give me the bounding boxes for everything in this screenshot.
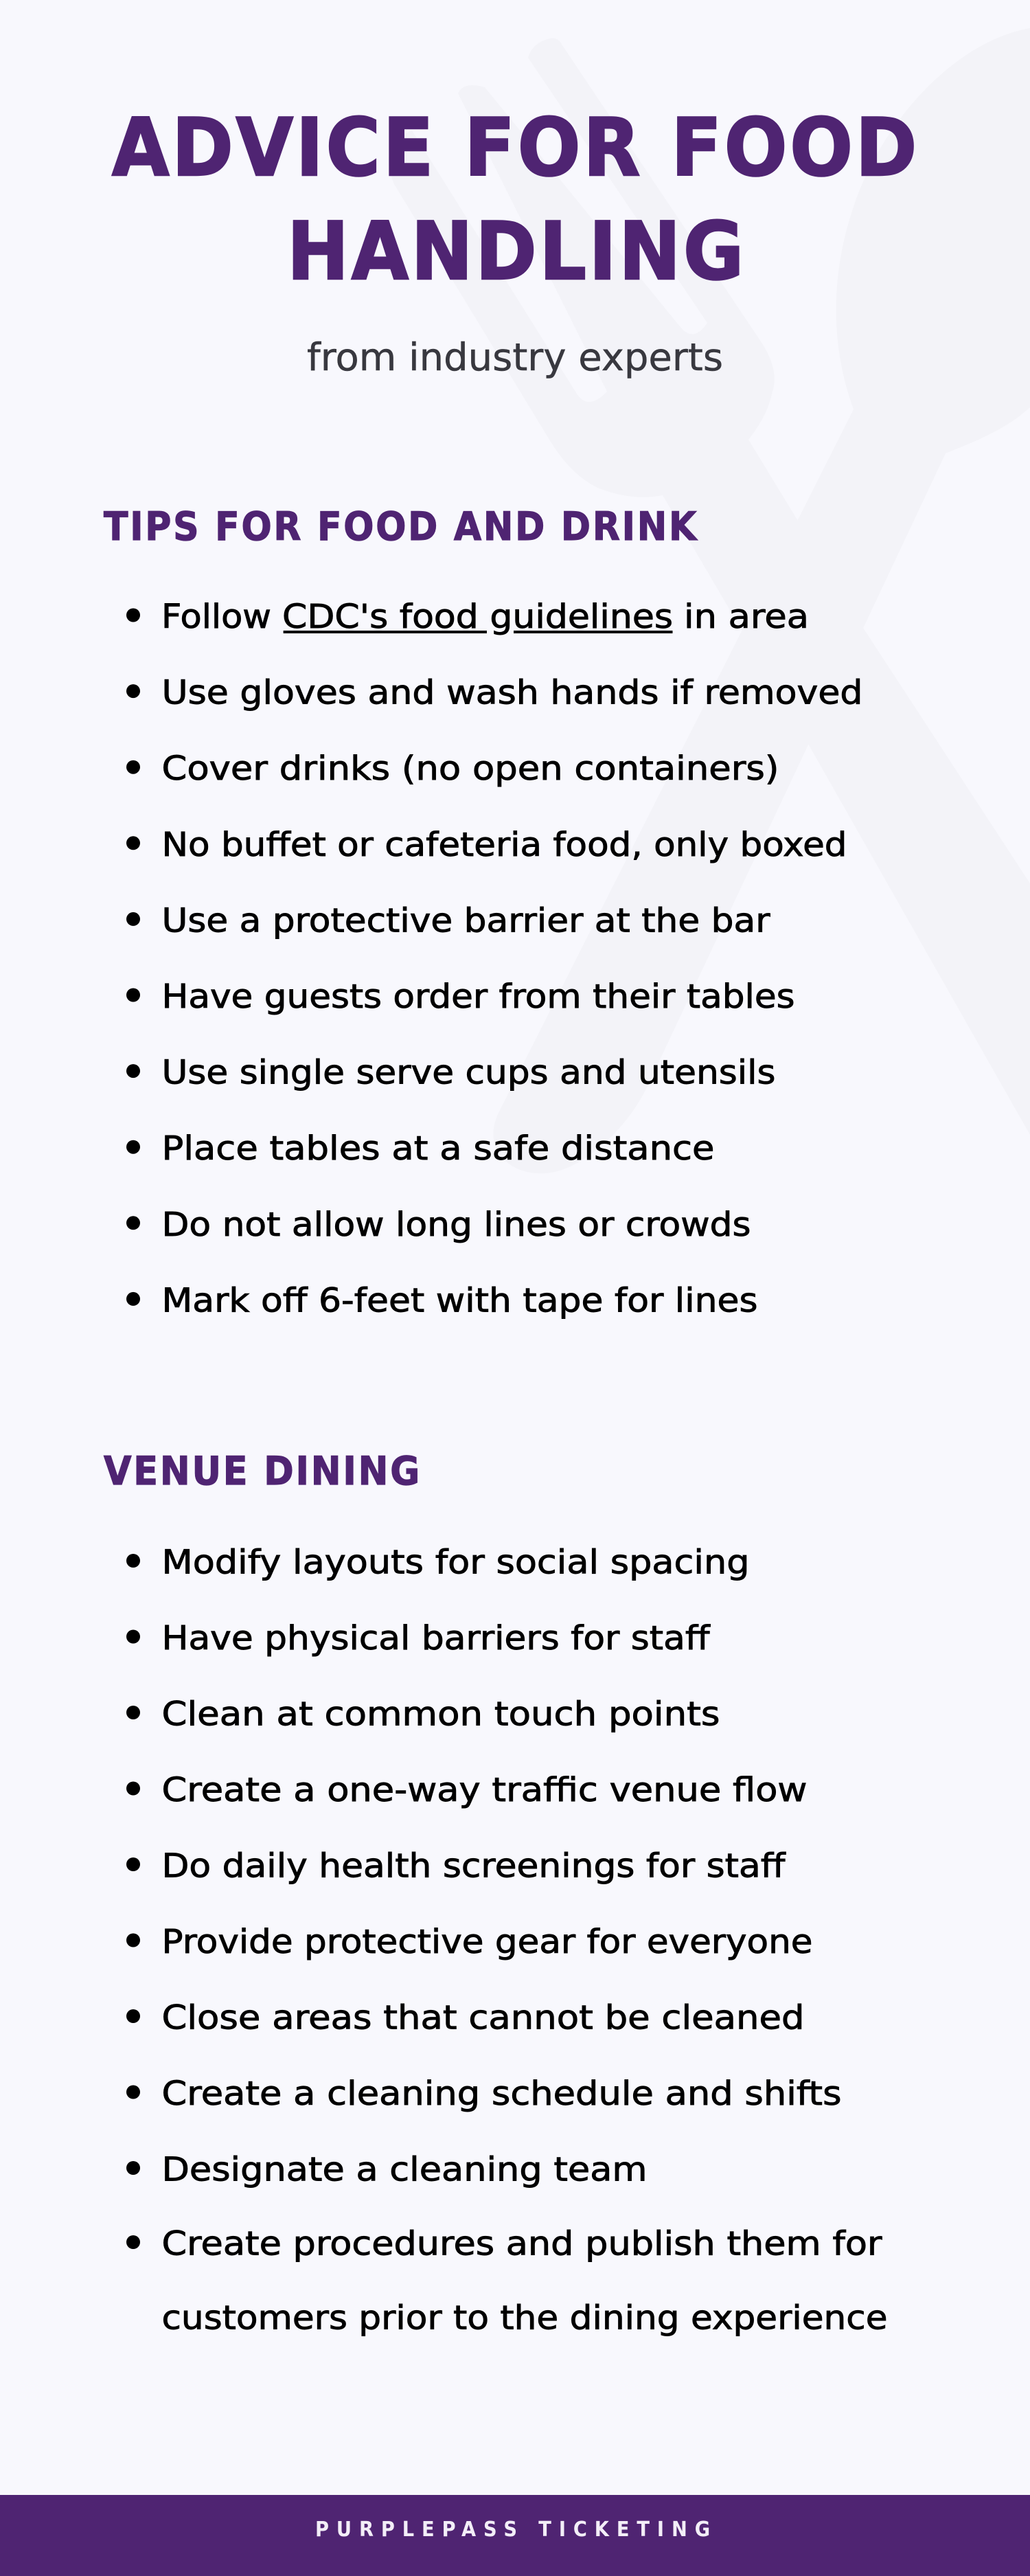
list item 1: Follow (161, 598, 271, 636)
list item 8: Place tables at a safe distance (162, 1129, 714, 1168)
title: HANDLING (287, 205, 746, 298)
list item 1: CDC's food guidelines (282, 598, 673, 636)
list item 6: Provide protective gear for everyone (162, 1923, 813, 1961)
list item 7: Close areas that cannot be cleaned (162, 1999, 805, 2037)
list item 10: customers prior to the dining experience (162, 2298, 887, 2337)
list item 9: Designate a cleaning team (162, 2150, 647, 2189)
list item 5: Do daily health screenings for staff (162, 1846, 786, 1885)
footer bar (0, 2495, 1030, 2576)
list: tips for food and drink (126, 598, 862, 1320)
list item 1: in area (684, 598, 809, 636)
icon: spoon (493, 28, 1030, 1173)
list item 4: No buffet or cafeteria food, only boxed (162, 826, 847, 864)
list item 10: Create procedures and publish them for (162, 2224, 882, 2263)
list item 1: Modify layouts for social spacing (162, 1543, 750, 1581)
list item 8: Create a cleaning schedule and shifts (162, 2075, 842, 2113)
list item 5: Use a protective barrier at the bar (162, 901, 770, 940)
icon: fork (389, 38, 1030, 1135)
list item 7: Use single serve cups and utensils (162, 1054, 776, 1092)
list item 4: Create a one-way traffic venue flow (162, 1771, 808, 1809)
list item 1 (126, 598, 809, 636)
icon: fork and spoon watermark (389, 28, 1030, 1173)
list item 10: Mark off 6-feet with tape for lines (162, 1281, 758, 1320)
title (112, 102, 919, 298)
list item 3: Cover drinks (no open containers) (162, 749, 779, 788)
list item 2: Have physical barriers for staff (162, 1619, 711, 1658)
list item 10 (126, 2224, 887, 2337)
list: venue dining (126, 1543, 887, 2337)
list item 9: Do not allow long lines or crowds (162, 1206, 751, 1244)
heading: venue dining: VENUE DINING (104, 1449, 422, 1494)
subtitle: from industry experts (307, 335, 723, 379)
footer text: PURPLEPASS TICKETING (315, 2518, 718, 2542)
list item 2: Use gloves and wash hands if removed (162, 674, 862, 712)
list item 6: Have guests order from their tables (162, 978, 795, 1016)
list item 3: Clean at common touch points (162, 1695, 720, 1734)
heading: tips for food and drink: TIPS FOR FOOD AND DRINK (104, 504, 698, 550)
title: ADVICE FOR FOOD (112, 102, 919, 194)
